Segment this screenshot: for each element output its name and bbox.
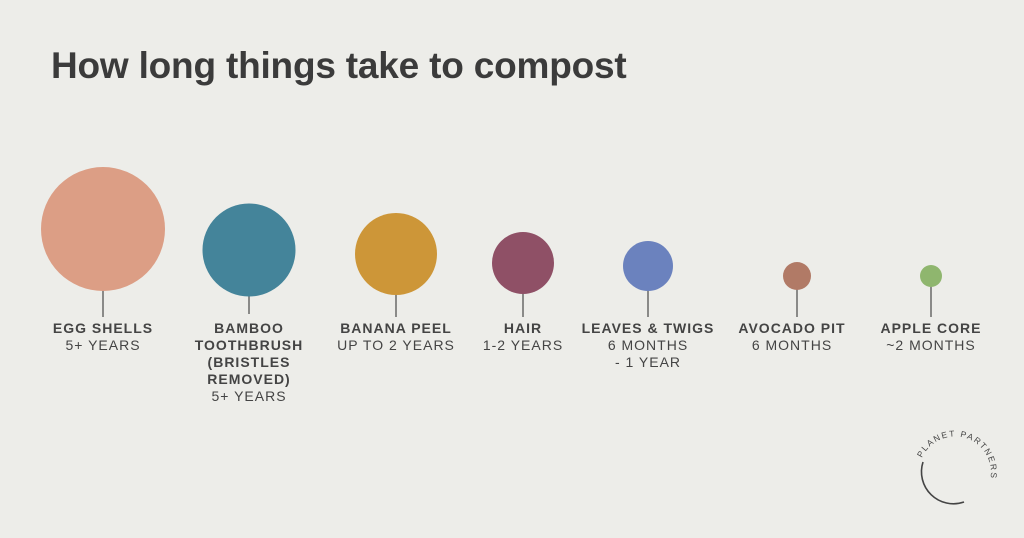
- label: banana peel: UP TO 2 YEARS: [337, 337, 455, 353]
- label: banana peel: [337, 320, 455, 353]
- label: apple core: APPLE CORE: [880, 320, 982, 336]
- label: banana peel: BANANA PEEL: [340, 320, 452, 336]
- label: bamboo toothbrush: REMOVED): [207, 371, 291, 387]
- bubble: egg shells: [41, 167, 165, 317]
- label: leaves & twigs: 6 MONTHS: [608, 337, 688, 353]
- label: bamboo toothbrush: BAMBOO: [214, 320, 284, 336]
- label: avocado pit: AVOCADO PIT: [738, 320, 846, 336]
- bubble: apple core: [920, 265, 942, 317]
- bubble: bamboo toothbrush: [202, 204, 296, 314]
- label: bamboo toothbrush: (BRISTLES: [208, 354, 290, 370]
- label: egg shells: [53, 320, 153, 353]
- label: avocado pit: 6 MONTHS: [752, 337, 832, 353]
- label: leaves & twigs: LEAVES & TWIGS: [582, 320, 714, 336]
- label: avocado pit: [738, 320, 846, 353]
- label: bamboo toothbrush: TOOTHBRUSH: [195, 337, 303, 353]
- label: hair: [483, 320, 563, 353]
- title: How long things take to compost: [51, 45, 627, 86]
- label: hair: HAIR: [504, 320, 542, 336]
- label: leaves & twigs: - 1 YEAR: [615, 354, 681, 370]
- bubble: banana peel: [355, 213, 437, 317]
- label: bamboo toothbrush: [194, 320, 303, 404]
- bubble: avocado pit: [783, 262, 811, 317]
- label: leaves & twigs: [582, 320, 714, 370]
- label: apple core: ~2 MONTHS: [886, 337, 976, 353]
- bubble: leaves & twigs: [623, 241, 673, 317]
- label: egg shells: EGG SHELLS: [53, 320, 153, 336]
- label: bamboo toothbrush: 5+ YEARS: [211, 388, 287, 404]
- bubble: hair: [492, 232, 554, 317]
- logo: planet partners: [917, 430, 997, 505]
- label: hair: 1-2 YEARS: [483, 337, 563, 353]
- label: egg shells: 5+ YEARS: [65, 337, 141, 353]
- label: apple core: [880, 320, 982, 353]
